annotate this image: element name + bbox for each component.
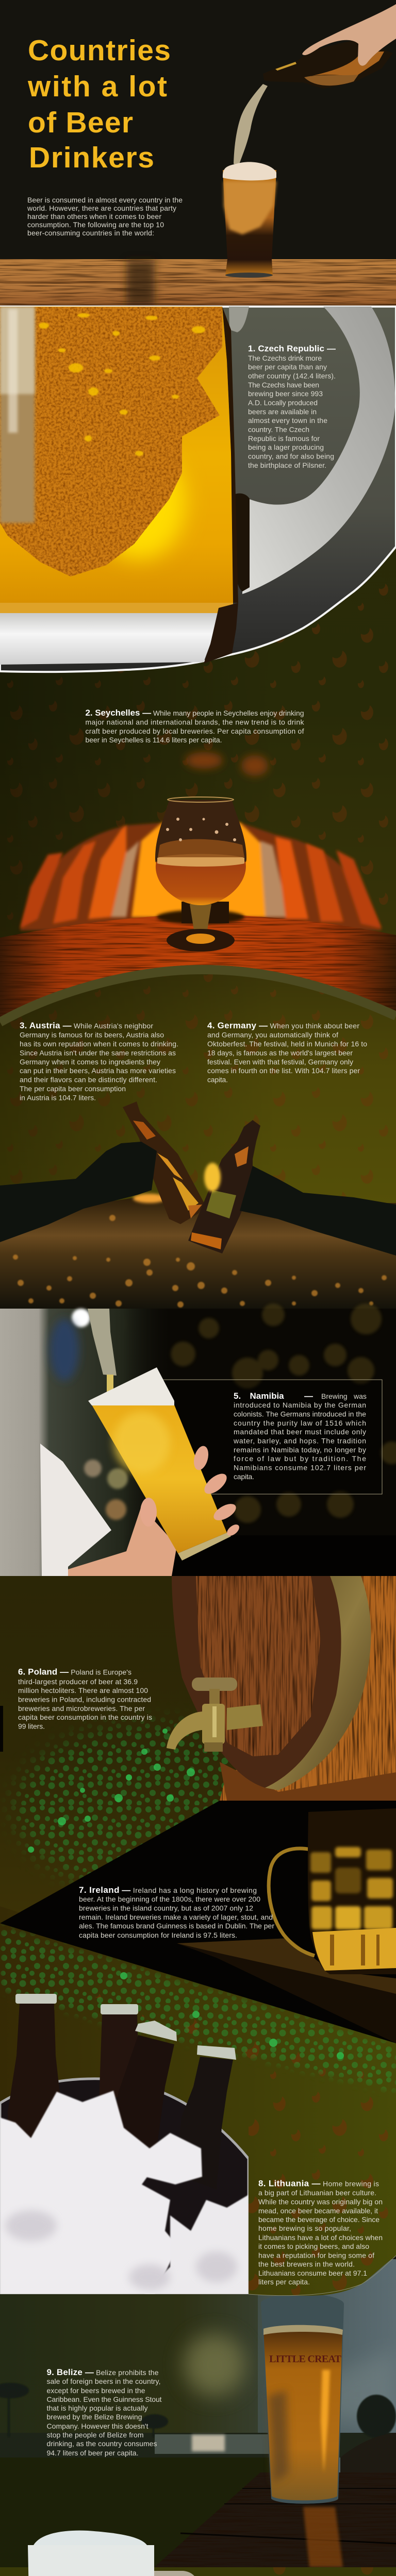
ice shading [5,2210,237,2290]
illustration: Little Creatures pint glass: LITTLE CREAT [269,2353,342,2365]
text: 9. Belize: sale of foreign beers in the country, [46,2377,161,2385]
icon: handle joint [235,494,250,591]
intro text: consumption. The following are the top 10 [27,221,164,229]
text: 4. Germany: comes in fourth on the list. With 104.7 liters per [207,1066,360,1075]
text: 5. Namibia: introduced to Namibia by the German [234,1401,366,1409]
icon: mug handle [269,1849,315,1956]
barrel backing glow [20,823,382,930]
title: Drinkers [29,141,154,174]
bottle 3 [108,2021,177,2164]
mug dark edge [222,307,238,603]
text: 8. Lithuania: the best brewers in the world. [258,2260,355,2268]
text: 7. Ireland [79,1885,274,1939]
text: 5. Namibia: Brewing [321,1392,348,1400]
illustration: left arm silhouette [0,1142,157,1242]
text: 6. Poland: breweries and microbreweries. The per [18,1704,145,1713]
illustration: right bottle [188,1120,260,1253]
bottle 2 [99,2004,139,2102]
barrel side [220,1576,396,1801]
text: 2. Seychelles: beer in Seychelles is 114.6 liters per capita. [86,736,222,744]
text: 4. Germany: festival. Even with that festival, Germany only [207,1058,353,1066]
text: 9. Belize [46,2367,162,2457]
text: 5. Namibia: Namibians consume 102.7 liters per [234,1463,366,1471]
illustration: left bottle [123,1101,205,1224]
barrel lid [0,914,396,1018]
foam strip [0,307,35,523]
ice right [144,2195,249,2294]
text: 8. Lithuania: Lithuanians consume beer at 97.1 [258,2269,367,2277]
title: with a lot [27,70,167,103]
grass [0,2458,278,2567]
text: 5. Namibia: was [353,1392,367,1400]
text: 1. Czech Republic: beers are available in [248,408,317,416]
text: 9. Belize: Caribbean. Even the Guinness Stout [46,2395,162,2403]
text: 7. Ireland: capita beer consumption for Ireland is 97.5 liters. [79,1931,237,1939]
icon: beer stream [234,84,268,166]
barrel lid shadow band [0,970,396,1022]
barrel staves [20,823,382,928]
bucket interior [0,2079,249,2294]
text: 2. Seychelles: 2. Seychelles — While many people in Seychelles enjoy drinking [86,708,304,718]
text: 7. Ireland: ales. The famous brand Guinness is based in Dublin. The per [79,1922,274,1930]
icon: fingers [140,1444,241,1538]
text: 2. Seychelles [86,708,304,744]
text: 1. Czech Republic: other country (142.4 liters). [248,372,336,380]
wooden table [0,259,396,307]
illustration: bottles in ice bucket [0,1994,249,2294]
text: 7. Ireland: breweries in the island country, but as of 2007 only 12 [79,1904,253,1912]
text: 8. Lithuania: Lithuanians have a lot of choices when [258,2233,383,2242]
text: 5. Namibia: mandated that beer must include only [234,1428,366,1436]
text: 8. Lithuania: it comes to picking beers, and also [258,2242,369,2250]
title: Countries [28,34,171,67]
panel: Czech Republic arc panel [0,307,396,672]
text: 8. Lithuania: While the country was originally big on [258,2198,383,2206]
text: 1. Czech Republic [248,344,336,469]
text: 1. Czech Republic: being a lager producing [248,443,324,451]
floor [220,1762,396,1801]
text: 1. Czech Republic: 1. Czech Republic — [248,344,336,353]
text: 4. Germany: 4. Germany — When you think about beer [207,1021,359,1030]
intro text: world. However, there are countries that party [27,204,176,212]
amber base band [0,603,233,613]
title: of Beer [28,106,133,139]
icon: hand [302,4,396,66]
text: 6. Poland: 99 liters. [18,1722,45,1730]
text: 5. Namibia: colonists. The Germans introduced in the [234,1410,366,1418]
text: 3. Austria: The per capita beer consumption [20,1084,126,1093]
panel: header background [0,0,396,260]
illustration: frosted beer mug [22,2531,207,2576]
text: 3. Austria: Germany when it comes to ingredients they [20,1058,160,1066]
intro text: Beer is consumed in almost every country in the [27,196,183,204]
illustration: person with shirt and arm [40,1444,177,1576]
panel: Ireland dark triangle [0,1801,396,2043]
intro text: beer-consuming countries in the world: [27,229,154,237]
text: 1. Czech Republic: country. The Czech [248,426,309,434]
text: 1. Czech Republic: country, and for also being [248,452,334,461]
illustration: beer glass in hand [88,1367,241,1561]
text: 6. Poland: 6. Poland — Poland is Europe's [18,1667,131,1676]
text: 1. Czech Republic: brewing beer since 993 [248,389,323,398]
barrel end ring [172,1576,341,1788]
bubble highlights [39,313,205,456]
illustration: ledge [177,1938,396,2043]
illustration: Little Creatures pint glass [261,2294,344,2504]
panel: Lithuania and Belize photo background [0,2259,396,2567]
illustration: bokeh behind glass [84,1460,128,1520]
text: 4. Germany: and Germany, you automatically think of [207,1030,338,1039]
icon: mug rim highlight [229,307,249,332]
text: 6. Poland: capita beer consumption in the country is [18,1713,152,1721]
text: 9. Belize: that is highly popular is actually [46,2404,147,2412]
panel: Romania and footer background [0,2567,396,2576]
text: 2. Seychelles: major national and international brands, the new trend is to drink [86,718,304,726]
illustration: bottle and hand pouring [234,4,396,166]
text: 1. Czech Republic: the birthplace of Pilsner. [248,461,326,469]
palm silhouettes [0,2383,396,2438]
text: 3. Austria: and their flavors can be distinctly different. [20,1076,157,1084]
beer body [0,307,233,603]
green bokeh upper [8,1715,228,1884]
illustration: bokeh landscape [0,1194,396,1309]
text: 3. Austria: 3. Austria — While Austria's neighbor [20,1021,153,1030]
text: 4. Germany [207,1021,367,1084]
text: 8. Lithuania: a big part of Lithuanian beer culture. [258,2189,376,2197]
text: 5. Namibia: — [304,1391,313,1401]
blurred background lights [186,752,268,776]
intro text [27,196,183,237]
intro text: harder than others when it comes to beer [27,212,161,221]
text: 7. Ireland: 7. Ireland — Ireland has a long history of brewing [79,1885,257,1895]
small black marker [0,1706,3,1752]
text: 5. Namibia: 5. [234,1391,241,1401]
text: 5. Namibia: water, barley, and hops. The tradition [233,1436,366,1445]
illustration: wooden table [154,2472,396,2567]
illustration: Ireland glass mug [269,1808,396,1974]
text: 9. Belize: drinking, as the country consumes [46,2439,157,2448]
illustration: barrel with snifter [0,752,396,1022]
bubble cloud [0,307,222,577]
text: 1. Czech Republic: beer per capita than any [248,363,327,371]
callout box outline [163,1380,382,1494]
text: 1. Czech Republic: The Czechs have been [248,381,319,389]
glass base [0,613,219,665]
text: 2. Seychelles: craft beer produced by local breweries. Per capita consumption of [86,727,304,735]
bright glow in beer [112,463,195,569]
text: 3. Austria [20,1021,178,1101]
text: 4. Germany: Oktoberfest. The festival, held in Munich for 16 to [207,1040,367,1048]
text: 9. Belize: 94.7 liters of beer per capita. [46,2449,138,2457]
text: 4. Germany: capita. [207,1076,228,1084]
text: 1. Czech Republic: The Czechs drink more [248,354,322,362]
text: 7. Ireland: beer. At the beginning of the 1800s, there were over 200 [79,1895,260,1903]
text: 5. Namibia: country the purity law of 1516 which [234,1419,366,1427]
text: 3. Austria: Germany is famous for its beers, Austria also [20,1030,164,1039]
text: 8. Lithuania [258,2178,383,2286]
text: 3. Austria: can put in their beers, Austria has more varieties [20,1066,176,1075]
green bokeh bright spots [28,1728,344,2059]
icon: mug handle [242,307,395,594]
text: 3. Austria: has its own reputation when it comes to drinking. [20,1040,178,1048]
icon: mug handle [154,2571,207,2576]
text: 5. Namibia: capita. [234,1472,254,1481]
text: 5. Namibia [233,1391,367,1481]
text: 9. Belize: 9. Belize — Belize prohibits the [46,2367,159,2377]
bottle 4 [175,2045,236,2190]
illustration: beer tap [50,1309,117,1401]
sea strip [0,2433,396,2458]
text: 6. Poland [18,1667,152,1730]
title [27,34,171,174]
glass base dark edge [204,603,238,664]
panel: Namibia section background [0,1303,396,1576]
text: 6. Poland: third-largest producer of beer at 36.9 [18,1677,138,1686]
text: 1. Czech Republic: Republic is famous for [248,434,320,443]
text: 8. Lithuania: became the beverage of choice. Since [258,2215,380,2224]
text: 6. Poland: million hectoliters. There are almost 100 [18,1686,148,1694]
panel: olive background, sections 1 to 4 [0,307,396,1309]
icon: snifter glass [155,797,246,952]
photo background left [0,1309,175,1576]
text: 3. Austria: Since Austria isn't under the same restrictions as [20,1049,176,1057]
bottle 1 [8,1994,59,2109]
text: 5. Namibia: Namibia [250,1391,284,1401]
illustration: right arm silhouette [240,1166,396,1256]
bokeh lights [13,1215,387,1308]
text: 8. Lithuania: have a reputation for being some of [258,2251,374,2260]
text: 1. Czech Republic: almost every town in the [248,416,327,425]
metal band [265,1576,371,1790]
illustration: large beer mug [0,307,395,665]
text: 8. Lithuania: home brewing is so popular, [258,2224,351,2232]
green bokeh lower band [0,1922,396,2097]
ice [0,2091,202,2294]
text: 9. Belize: Company. However this doesn't [46,2422,148,2430]
illustration: pint glass of beer [223,162,276,278]
text: 1. Czech Republic: A.D. Locally produced [248,399,318,407]
text: 8. Lithuania: liters per capita. [258,2278,310,2286]
illustration: wooden barrel [167,1576,396,1801]
text: 6. Poland: breweries in Poland, including contracted [18,1695,151,1703]
text: 9. Belize: stop the people of Belize from [46,2431,143,2439]
text: 4. Germany: 18 days, is famous as the world's largest beer [207,1049,353,1057]
text: 9. Belize: brewed by the Belize Brewing [46,2413,142,2421]
mug dimples [310,1847,393,1929]
barrel end face [196,1576,321,1756]
icon: brass tap [167,1677,263,1752]
text: 3. Austria: in Austria is 104.7 liters. [20,1093,96,1101]
text: 7. Ireland: remain. Ireland breweries make a variety of lager, stout, and [79,1913,273,1921]
text: 9. Belize: except for beers brewed in the [46,2386,145,2395]
text: 8. Lithuania: 8. Lithuania — Home brewing is [258,2178,379,2189]
text: 5. Namibia: remains in Namibia today, no longer by [234,1446,366,1454]
panel: Poland and Ireland olive background [0,1576,396,2296]
chair [340,2433,396,2473]
text: 8. Lithuania: mead, once beer became available, it [258,2207,378,2215]
text: 5. Namibia: force of law but by tradition. The [234,1454,366,1463]
icon: bottle [263,40,393,89]
